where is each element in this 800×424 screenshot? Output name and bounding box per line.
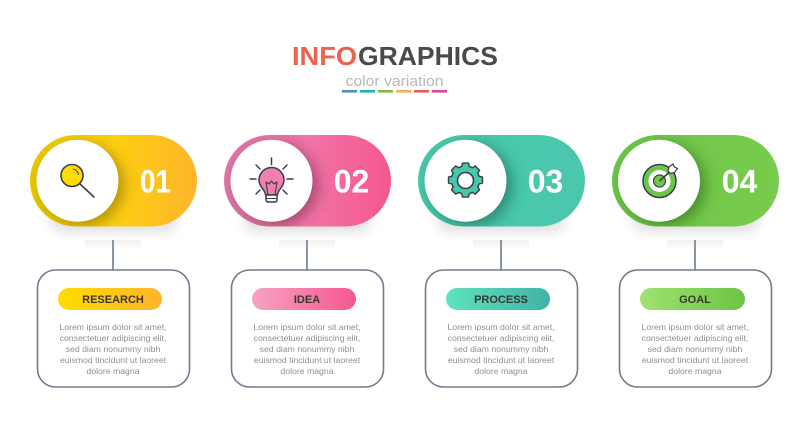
icon circle 03 <box>424 140 506 222</box>
panel: step 03 process <box>418 135 585 387</box>
body text 03: consectetuer adipiscing elit, <box>448 333 554 343</box>
label tag 03 <box>446 288 550 310</box>
icon circle 01 <box>36 140 118 222</box>
label tag 01 <box>58 288 162 310</box>
color legend bars <box>342 90 447 93</box>
body text 03: Lorem ipsum dolor sit amet, <box>447 322 555 332</box>
label tag 01: RESEARCH <box>82 294 144 306</box>
pill shadow 03 <box>436 218 567 244</box>
panel: step 04 goal <box>612 135 779 387</box>
body text 04: consectetuer adipiscing elit, <box>642 333 748 343</box>
panel: step 01 research <box>30 135 197 387</box>
text card 03 <box>426 270 578 387</box>
icon circle 02 <box>230 140 312 222</box>
body text 01: sed diam nonummy nibh <box>66 344 160 354</box>
connector 01 <box>112 240 114 270</box>
icon circle 04 <box>618 140 700 222</box>
number 02: 02 <box>334 164 369 200</box>
circle shadow 01 <box>42 144 124 226</box>
pill 02 <box>224 135 391 226</box>
pill 04 <box>612 135 779 226</box>
body text 03: sed diam nonummy nibh <box>454 344 548 354</box>
body text 02: sed diam nonummy nibh <box>260 344 354 354</box>
connector 04 <box>694 240 696 270</box>
label tag 04: GOAL <box>679 294 711 306</box>
icon: magnifier <box>61 164 94 197</box>
title <box>292 41 498 71</box>
text card 04 <box>620 270 772 387</box>
number 01: 01 <box>140 164 171 200</box>
text card 02 <box>232 270 384 387</box>
title: GRAPHICS <box>358 41 498 71</box>
connector 03 <box>500 240 502 270</box>
body text 01: dolore magna <box>86 366 140 376</box>
pill shadow 04 <box>630 218 761 244</box>
body text 04 <box>641 322 749 376</box>
body text 01 <box>59 322 167 376</box>
body text 04: euismod tincidunt ut laoreet <box>642 355 749 365</box>
label tag 04 <box>640 288 745 310</box>
label tag 02: IDEA <box>294 294 320 306</box>
circle shadow 02 <box>236 144 318 226</box>
body text 01: Lorem ipsum dolor sit amet, <box>59 322 167 332</box>
pill shadow 01 <box>48 218 179 244</box>
circle shadow 04 <box>624 144 706 226</box>
panel: step 02 idea <box>224 135 391 387</box>
body text 03 <box>447 322 555 376</box>
circle shadow 03 <box>430 144 512 226</box>
icon: target <box>643 164 678 198</box>
subtitle: color variation <box>346 73 444 90</box>
pill 03 <box>418 135 585 226</box>
pill 01 <box>30 135 197 226</box>
number 03: 03 <box>528 164 563 200</box>
text card 01 <box>38 270 190 387</box>
body text 03: dolore magna <box>474 366 528 376</box>
label tag 02 <box>252 288 356 310</box>
body text 04: Lorem ipsum dolor sit amet, <box>641 322 749 332</box>
icon: light bulb <box>250 158 293 202</box>
body text 02: euismod tincidunt ut laoreet <box>254 355 361 365</box>
body text 02: dolore magna <box>280 366 334 376</box>
body text 02 <box>253 322 361 376</box>
body text 04: dolore magna <box>668 366 722 376</box>
body text 01: euismod tincidunt ut laoreet <box>60 355 167 365</box>
icon: gear <box>448 163 482 197</box>
label tag 03: PROCESS <box>474 294 528 306</box>
body text 03: euismod tincidunt ut laoreet <box>448 355 555 365</box>
number 04: 04 <box>722 164 758 200</box>
pill shadow 02 <box>242 218 373 244</box>
title: INFO <box>292 41 357 71</box>
body text 01: consectetuer adipiscing elit, <box>60 333 166 343</box>
connector 02 <box>306 240 308 270</box>
body text 04: sed diam nonummy nibh <box>648 344 742 354</box>
body text 02: Lorem ipsum dolor sit amet, <box>253 322 361 332</box>
body text 02: consectetuer adipiscing elit, <box>254 333 360 343</box>
